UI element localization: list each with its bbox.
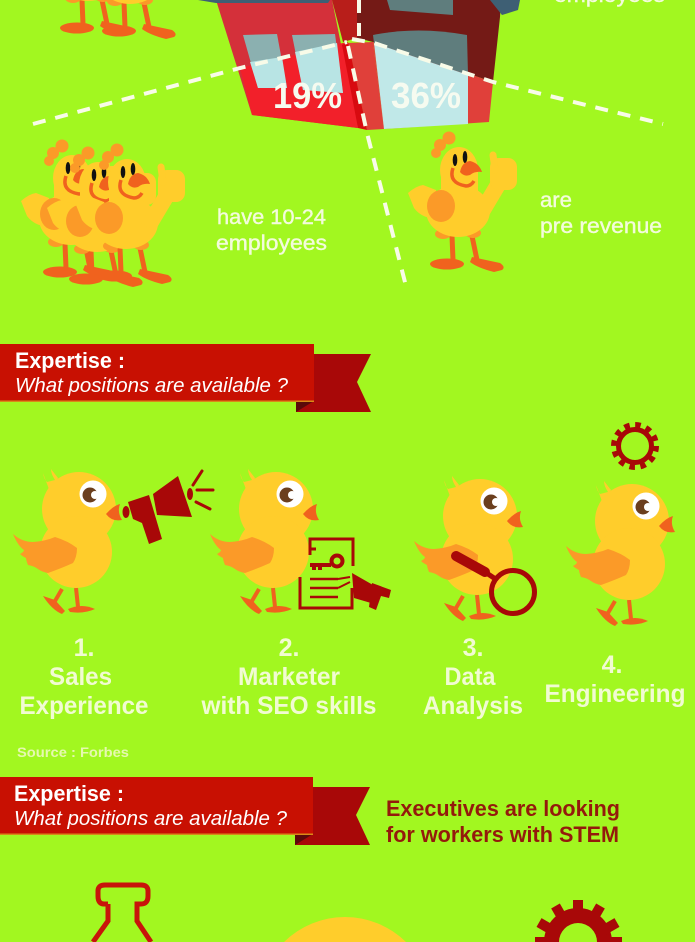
label 4: Engineering: Engineering <box>544 680 686 708</box>
label 1: Sales Experience <box>20 634 149 720</box>
label 2: Marketer with SEO skills <box>201 634 376 720</box>
right wall <box>357 0 501 82</box>
banner heading: Expertise : <box>15 348 125 373</box>
left windows <box>243 34 287 88</box>
value: 19%: 19% <box>273 75 342 116</box>
icon: gear <box>614 425 656 467</box>
icon: megaphone <box>122 471 213 544</box>
icon: document with key <box>300 539 353 608</box>
icon: small megaphone <box>352 573 391 610</box>
text: executives looking for STEM: for workers with STEM <box>386 822 619 847</box>
banner subheading: What positions are available ? <box>15 375 289 397</box>
icon: large gear <box>535 900 622 942</box>
label 3: Data Analysis: Analysis <box>423 692 523 720</box>
text: have 10-24 employees: employees <box>216 231 327 255</box>
label 4: Engineering: 4. <box>602 651 622 679</box>
left wall <box>216 0 358 128</box>
text: have 10-24 employees <box>216 205 327 255</box>
banner: positions <box>0 344 371 412</box>
position 1: chick with megaphone <box>13 469 213 614</box>
value: 36%: 36% <box>391 75 461 116</box>
text: have 10-24 employees: have 10-24 <box>217 205 326 229</box>
source note: Source : Forbes <box>17 744 129 760</box>
label 3: Data Analysis: 3. <box>463 634 483 662</box>
label 4: Engineering <box>544 651 686 708</box>
top hens, cropped <box>38 0 189 39</box>
text: are pre revenue <box>540 188 662 238</box>
label 2: Marketer with SEO skills: with SEO skills <box>201 692 376 720</box>
banner subheading: What positions are available ? <box>14 808 288 830</box>
icon: flask <box>93 885 151 942</box>
position 4: chick with gear <box>566 425 675 626</box>
roof <box>198 0 330 3</box>
label 2: Marketer with SEO skills: 2. <box>279 634 299 662</box>
text: are pre revenue: pre revenue <box>540 214 662 238</box>
icon: yellow circle <box>284 917 406 942</box>
centre pillar <box>332 0 357 42</box>
right windows <box>387 0 453 15</box>
label 3: Data Analysis: Data <box>444 663 497 691</box>
label 1: Sales Experience: 1. <box>74 634 94 662</box>
text: executives looking for STEM <box>386 796 620 847</box>
text: executives looking for STEM: Executives are looking <box>386 796 620 821</box>
position 2: chick with document and megaphone <box>210 469 391 614</box>
text: are pre revenue: are <box>540 188 572 212</box>
label 1: Sales Experience: Sales <box>49 663 112 691</box>
single hen <box>408 132 517 272</box>
label 1: Sales Experience: Experience <box>20 692 149 720</box>
house pie chart <box>198 0 520 130</box>
icon: magnifying glass <box>456 556 534 614</box>
label 2: Marketer with SEO skills: Marketer <box>238 663 340 691</box>
banner: STEM <box>0 777 370 845</box>
label 3: Data Analysis <box>423 634 523 720</box>
dashed pie dividers <box>33 0 663 290</box>
banner heading: Expertise : <box>14 781 124 806</box>
position 3: chick with magnifier <box>414 476 534 621</box>
three hens <box>21 140 185 287</box>
